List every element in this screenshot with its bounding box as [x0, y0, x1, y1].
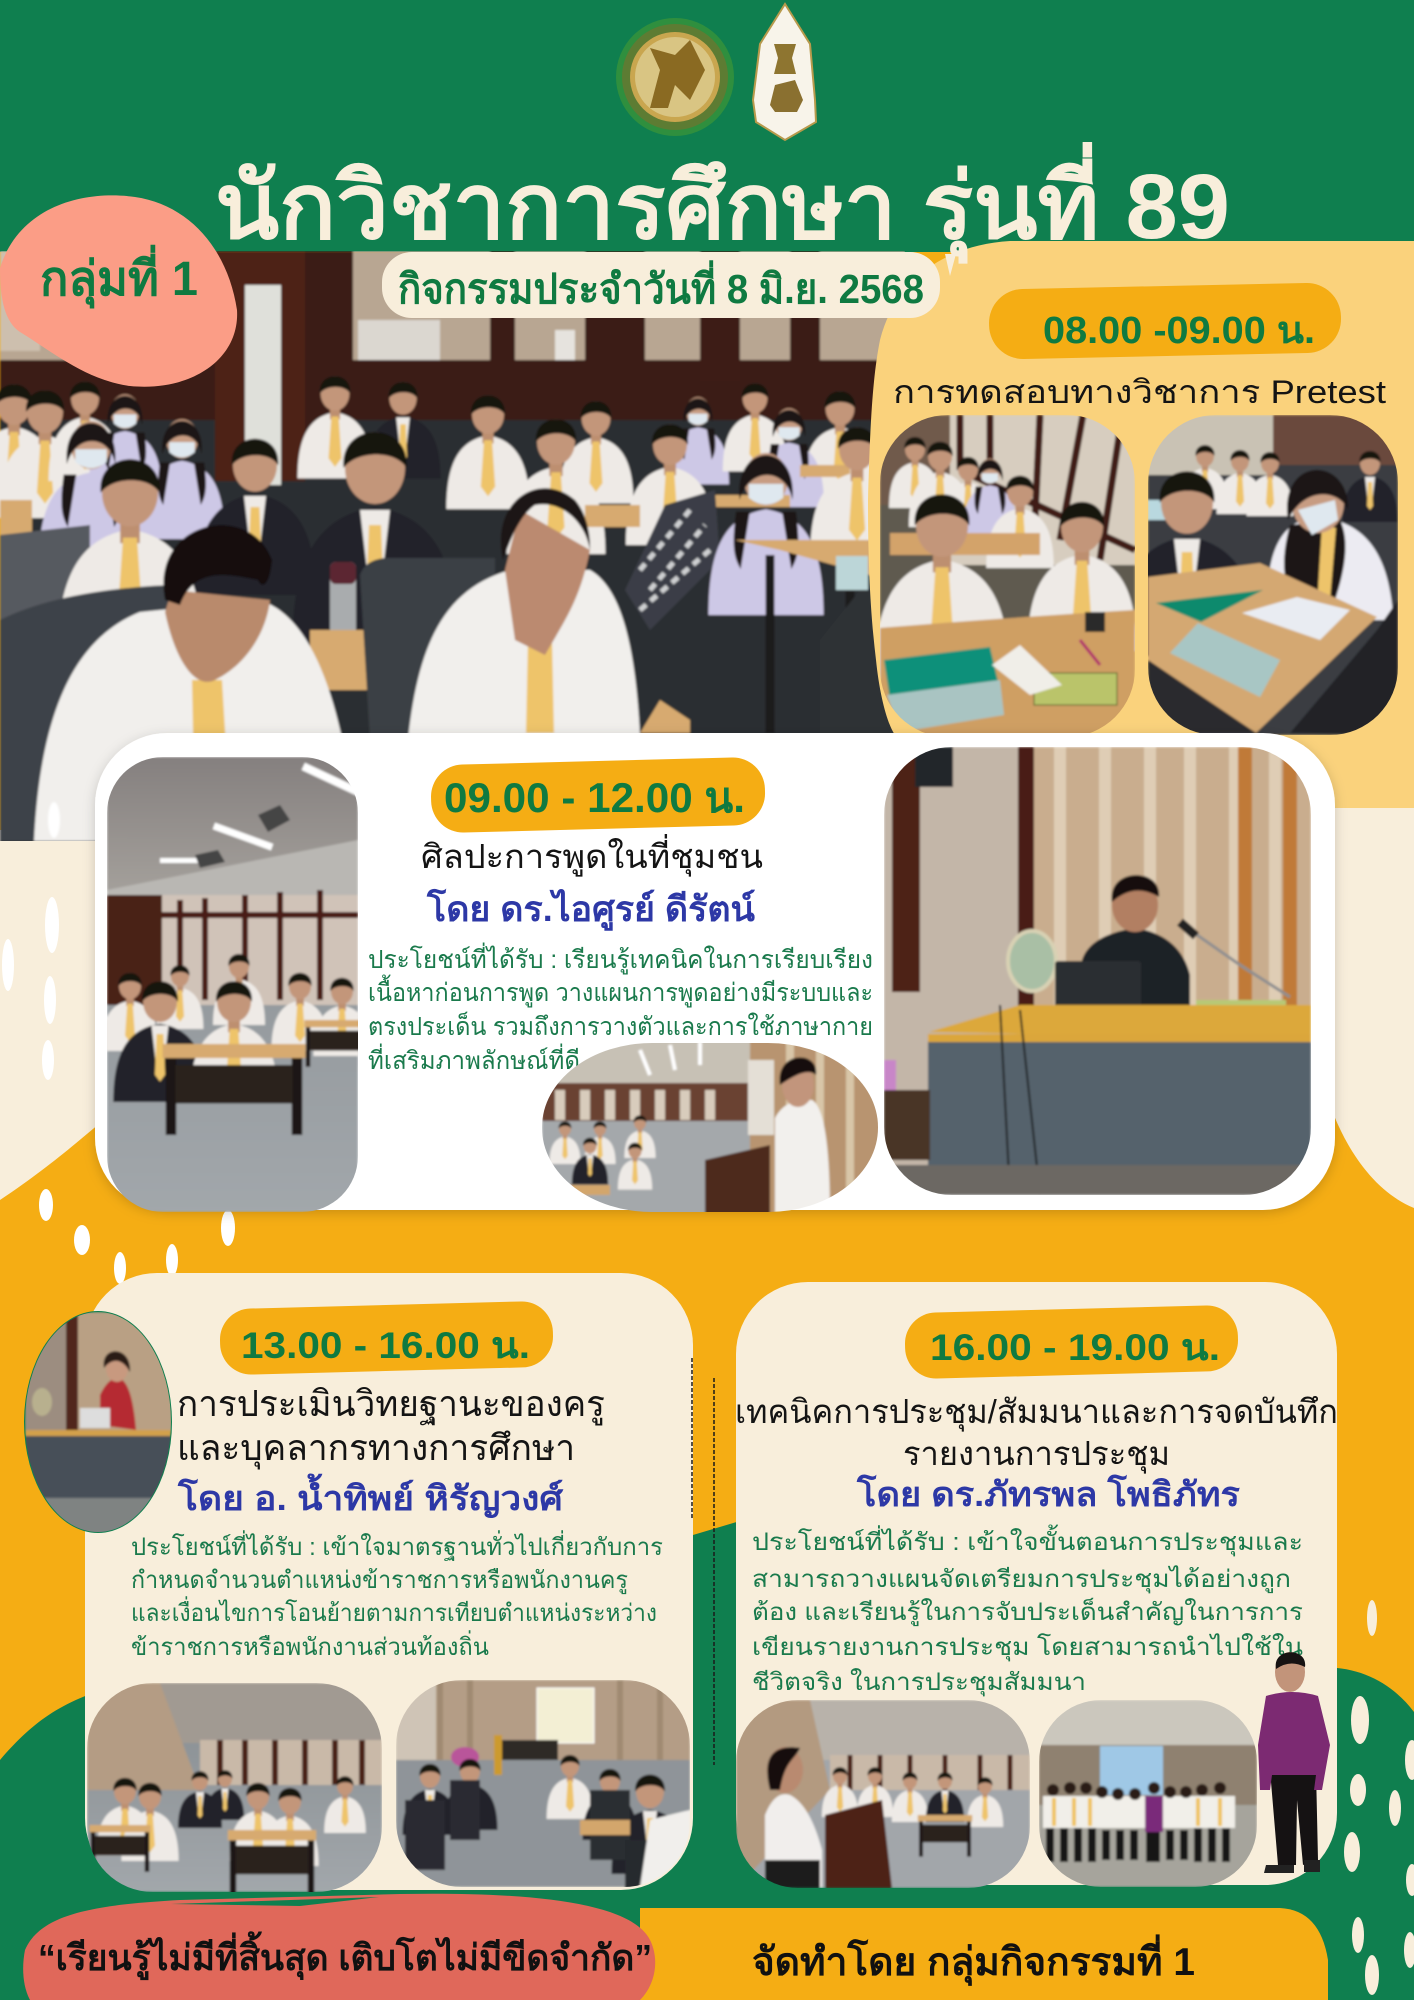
header: green band: [0, 0, 1414, 252]
benefits text: ต้อง และเรียนรู้ในการจับประเด็นสำคัญในการการ: [752, 1597, 1303, 1627]
logo: crest shield: [753, 4, 816, 140]
background: cream paint strokes on green: [1344, 1600, 1414, 1995]
photo: lecturer at desk: [884, 747, 1311, 1195]
photo: classroom from front: [101, 757, 371, 1212]
paint stroke beside date pill: [945, 254, 956, 276]
benefits text: เนื้อหาก่อนการพูด วางแผนการพูดอย่างมีระบบและ: [368, 974, 873, 1008]
logo: department seal: [616, 18, 734, 136]
session title: รายงานการประชุม: [903, 1435, 1170, 1474]
background: green lower blobs: [0, 1515, 1414, 2000]
photo: group portrait with screen: [1039, 1700, 1257, 1887]
footer text: organizer: จัดทำโดย กลุ่มกิจกรรมที่ 1: [752, 1934, 1195, 1986]
benefits text: ข้าราชการหรือพนักงานส่วนท้องถิ่น: [131, 1630, 489, 1661]
speaker name: โดย อ. น้ำทิพย์ หิรัญวงศ์: [177, 1473, 563, 1519]
panel: meeting techniques session: [735, 1282, 1338, 1888]
front woman: [406, 568, 642, 733]
back rows: [298, 376, 372, 478]
photo: woman with mask at exam table: [1148, 415, 1398, 735]
benefits text: ชีวิตจริง ในการประชุมสัมมนา: [752, 1668, 1086, 1697]
benefits text: ที่เสริมภาพลักษณ์ที่ดี: [368, 1043, 580, 1075]
middle rows: [40, 420, 122, 548]
footer: coral blob with quote: [23, 1894, 655, 2000]
session title: และบุคลากรทางการศึกษา: [177, 1427, 575, 1470]
front man: [34, 600, 352, 841]
main photo: participants in classroom: [0, 251, 905, 851]
badge label: กลุ่มที่ 1: [40, 244, 198, 309]
photo: meeting room wide view: [87, 1683, 382, 1898]
benefits text: กำหนดจำนวนตำแหน่งข้าราชการหรือพนักงานครู: [131, 1567, 628, 1595]
speaker name: โดย ดร.ไอศูรย์ ดีรัตน์: [426, 888, 755, 931]
time pill: [904, 1305, 1239, 1379]
panel: public speaking: [95, 733, 1335, 1215]
benefits text: ประโยชน์ที่ได้รับ : เข้าใจขั้นตอนการประชุมและ: [752, 1524, 1303, 1557]
benefits text: สามารถวางแผนจัดเตรียมการประชุมได้อย่างถูก: [752, 1565, 1291, 1594]
small portrait: lecturer in red: [24, 1311, 172, 1538]
footer: orange band: [640, 1908, 1328, 2000]
photo: hall with screen: [396, 1680, 690, 1890]
session title: เทคนิคการประชุม/สัมมนาและการจดบันทึก: [735, 1393, 1338, 1432]
date text: กิจกรรมประจำวันที่ 8 มิ.ย. 2568: [398, 260, 924, 312]
dashed dividers: [692, 1358, 714, 1765]
background: cream right shape: [1300, 800, 1414, 1208]
time pill: [430, 757, 766, 833]
session title: [177, 1383, 605, 1470]
date pill: [382, 252, 940, 318]
heading: time 08-09: 08.00 -09.00 น.: [1043, 310, 1315, 352]
badge: group 1: [0, 195, 237, 387]
benefits text: ประโยชน์ที่ได้รับ : เข้าใจมาตรฐานทั่วไปเกี่ยวกับการ: [131, 1530, 663, 1561]
cutout: man in purple shirt: [1258, 1652, 1330, 1873]
benefits text: ประโยชน์ที่ได้รับ : เรียนรู้เทคนิคในการเรียบเรียง: [368, 942, 873, 975]
photo: student at podium: [542, 1040, 882, 1215]
session title: [735, 1393, 1338, 1474]
benefits text: ตรงประเด็น รวมถึงการวางตัวและการใช้ภาษากาย: [368, 1011, 873, 1041]
session title: การประเมินวิทยฐานะของครู: [177, 1383, 605, 1426]
benefits text: และเงื่อนไขการโอนย้ายตามการเทียบตำแหน่งระหว่าง: [131, 1596, 657, 1627]
benefits text: เขียนรายงานการประชุม โดยสามารถนำไปใช้ใน: [752, 1633, 1303, 1662]
background: cream left shape: [0, 830, 140, 1200]
photo: student at lectern: [736, 1700, 1030, 1888]
photo: two men at exam table: [874, 415, 1137, 737]
time pill: 16.00 - 19.00 น.: [930, 1327, 1220, 1368]
background: white paint strokes: [2, 897, 235, 1310]
speaker name: โดย ดร.ภัทรพล โพธิภัทร: [856, 1474, 1241, 1514]
panel: teacher qualification session: [85, 1273, 693, 1898]
quote: “เรียนรู้ไม่มีที่สิ้นสุด เติบโตไม่มีขีดจำกัด”: [38, 1931, 652, 1981]
title: นักวิชาการศึกษา รุ่นที่ 89: [215, 141, 1230, 264]
benefits text: [752, 1524, 1303, 1697]
panel: pretest background: [868, 241, 1414, 808]
benefits text: [131, 1530, 663, 1661]
time pill: 13.00 - 16.00 น.: [241, 1325, 530, 1366]
time pill: 09.00 - 12.00 น.: [444, 774, 745, 821]
heading: pretest: การทดสอบทางวิชาการ Pretest: [893, 374, 1386, 410]
session title: ศิลปะการพูดในที่ชุมชน: [421, 834, 763, 877]
time pill: [219, 1301, 554, 1375]
benefits text: [368, 942, 873, 1075]
heading: time 08-09: [988, 282, 1342, 360]
